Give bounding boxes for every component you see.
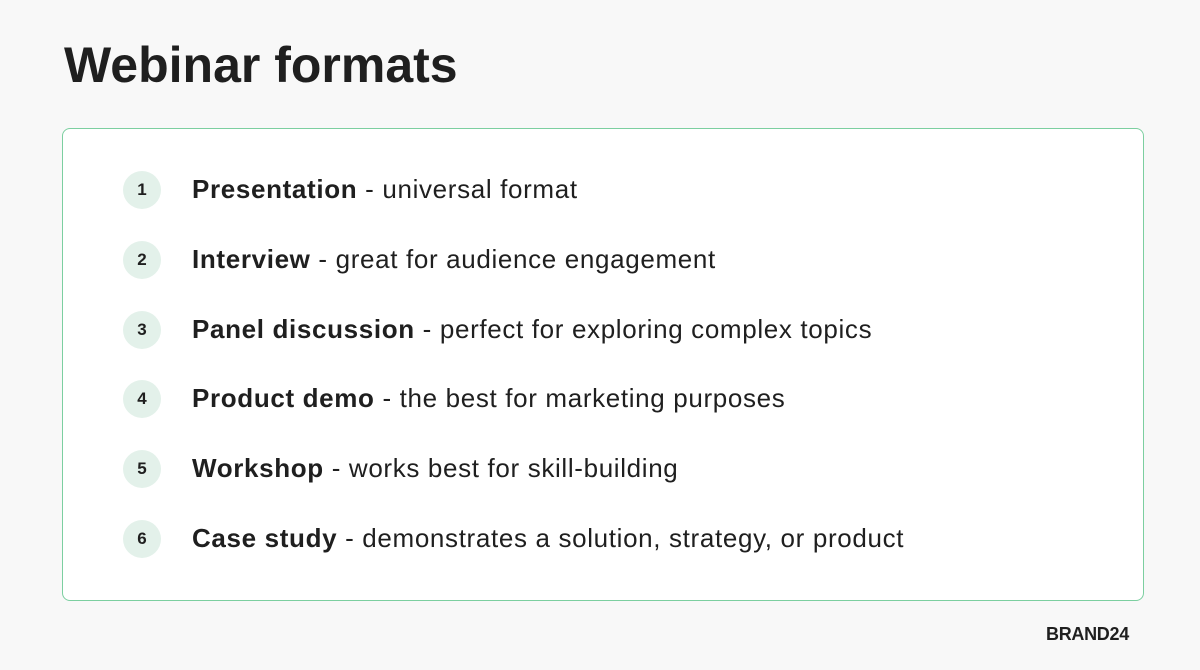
title: Webinar formats	[64, 37, 458, 93]
item 3: 3	[137, 320, 147, 339]
item 1: 1	[137, 180, 147, 199]
item 5: 5	[137, 459, 147, 478]
item 6: 6	[137, 529, 147, 548]
item 6: Case study - demonstrates a solution, strategy, or product	[192, 522, 904, 552]
item 4: 4	[137, 389, 147, 408]
item 2	[123, 241, 716, 279]
item 1: Presentation - universal format	[192, 174, 578, 204]
item 2: Interview - great for audience engagement	[192, 244, 716, 274]
panel: formats list	[62, 128, 1144, 601]
item 1	[123, 171, 578, 209]
brand logo: BRAND24	[1046, 624, 1129, 644]
item 4: Product demo - the best for marketing purposes	[192, 382, 785, 412]
item 5: Workshop - works best for skill-building	[192, 452, 678, 482]
item 2: 2	[137, 250, 147, 269]
item 5	[123, 450, 678, 488]
item 3: Panel discussion - perfect for exploring complex topics	[192, 314, 872, 344]
